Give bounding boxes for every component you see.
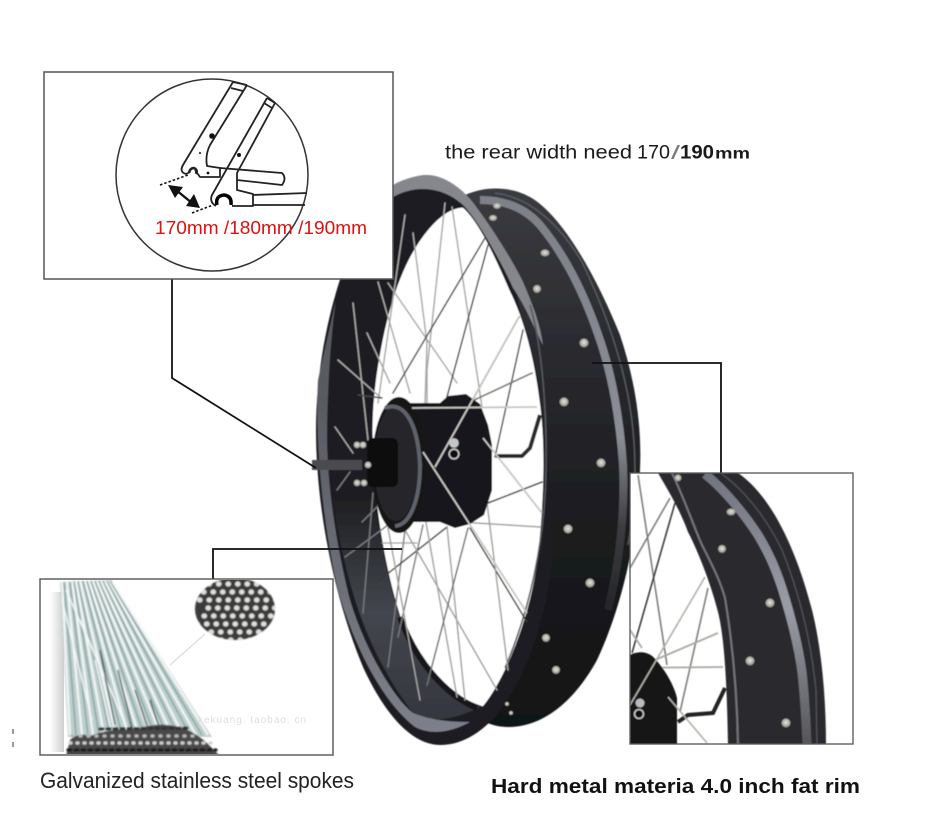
edge marks	[12, 729, 14, 747]
inset hub	[630, 652, 677, 744]
spoke ends magnified circle	[194, 580, 276, 642]
heading: rear width need: the rear width need	[445, 142, 632, 164]
rear rim band	[465, 188, 640, 727]
leader line	[170, 634, 205, 665]
infographic canvas	[12, 71, 859, 793]
connector: rear width panel to axle	[172, 279, 316, 468]
panel: rim detail	[630, 473, 853, 744]
heading: rear width need: mm	[715, 146, 750, 162]
heading: rear width need	[445, 142, 750, 164]
spokes	[335, 203, 542, 700]
inset rim band	[658, 473, 826, 744]
front rim upper lip	[393, 175, 543, 345]
wheel opening	[372, 207, 544, 707]
heading: rear width need: /	[671, 142, 681, 164]
hub motor	[312, 394, 492, 533]
inset rivets	[674, 474, 790, 728]
connector: rim to rim detail panel	[592, 363, 721, 473]
torque arm	[496, 415, 540, 456]
front rim ring	[316, 175, 552, 745]
caption: rim: Hard metal materia 4.0 inch fat rim	[491, 776, 860, 798]
panel: rear width diagram	[44, 72, 393, 279]
rim rivets	[489, 203, 606, 715]
spoke heads	[66, 725, 220, 756]
rim light strip	[480, 200, 623, 610]
rim outer grooves	[495, 193, 635, 545]
front rim lower lip	[317, 300, 470, 732]
red width label: 170mm /180mm /190mm	[155, 218, 367, 238]
heading: rear width need: 170	[637, 142, 670, 164]
width arrow	[168, 185, 200, 208]
dropout circle	[116, 79, 308, 271]
watermark: kekuang. taobao. cn	[198, 715, 307, 726]
shadow behind spokes	[52, 592, 64, 752]
connector: spokes panel to spokes	[213, 549, 402, 580]
heading: rear width need: 190	[680, 142, 714, 164]
panel: spokes photo	[40, 578, 333, 756]
dotted width guides	[160, 175, 213, 213]
hole dark inner edge	[400, 617, 477, 708]
lower inner rim surface	[333, 500, 480, 719]
spokes over hub	[412, 317, 542, 613]
bike frame dropouts	[182, 82, 307, 206]
main wheel	[312, 175, 640, 745]
caption: spokes: Galvanized stainless steel spokes	[40, 768, 354, 793]
spokes bundle	[60, 580, 220, 756]
inset spokes	[630, 475, 708, 712]
inner rim edge line	[505, 305, 546, 668]
